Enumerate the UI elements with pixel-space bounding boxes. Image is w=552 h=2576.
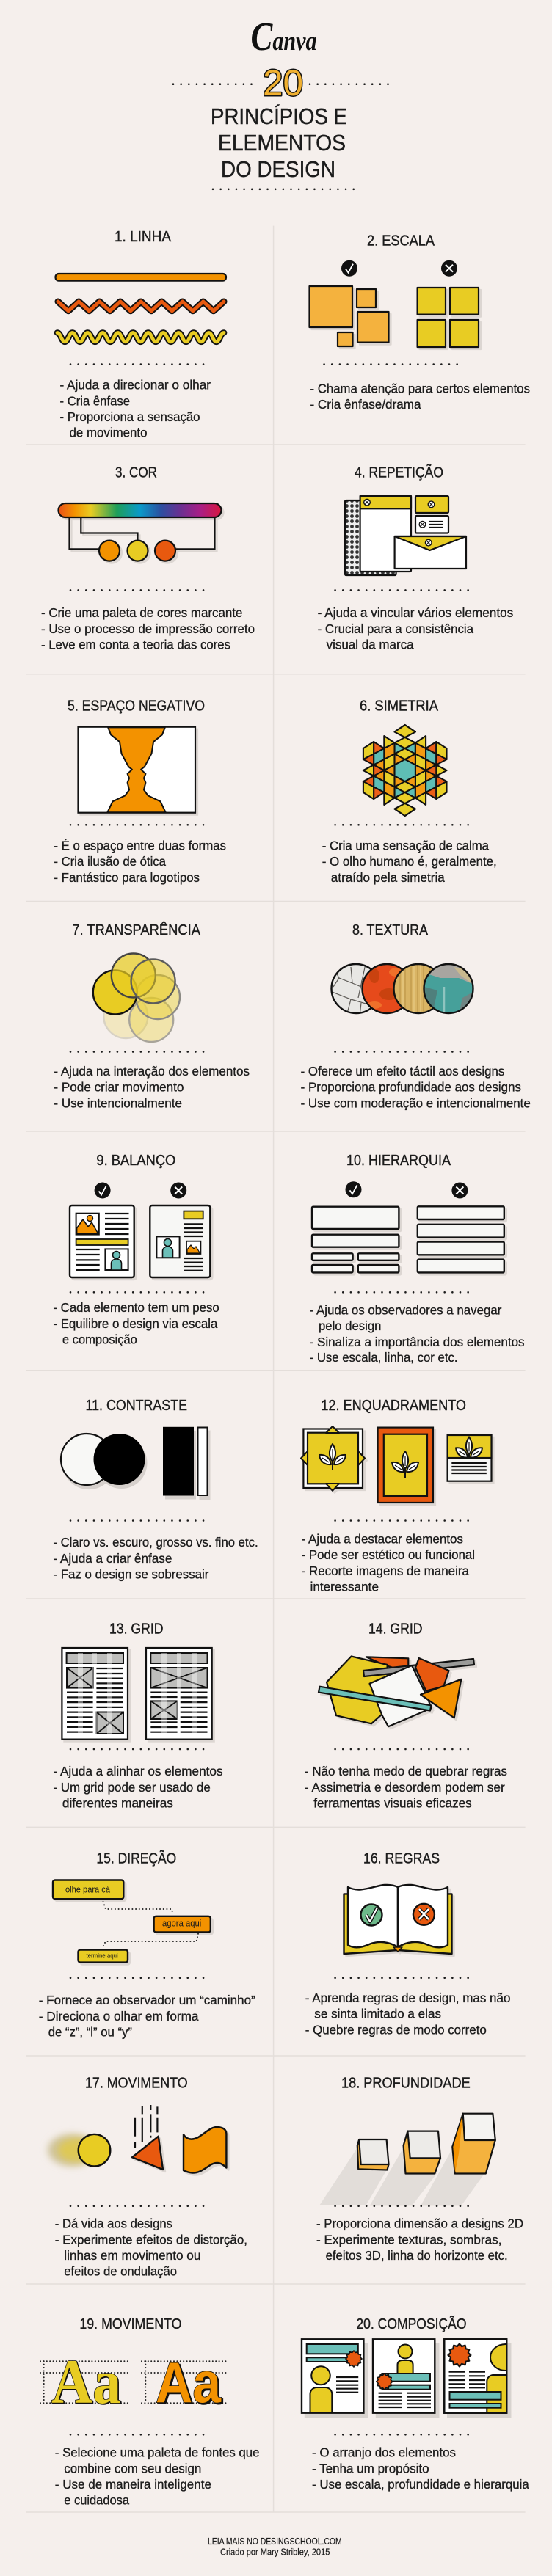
text block: - Experimente texturas, sombras, bbox=[316, 2232, 502, 2247]
icon: check bbox=[95, 1183, 111, 1199]
icon: open book bbox=[344, 1885, 452, 1954]
text block: - Selecione uma paleta de fontes que bbox=[55, 2445, 260, 2460]
heading: 6. SIMETRIA bbox=[360, 697, 438, 715]
panel: 16 regras bbox=[305, 1850, 510, 2037]
icon: image card bbox=[448, 1435, 492, 1481]
heading: 7. TRANSPARÊNCIA bbox=[72, 922, 200, 938]
text block: pelo design bbox=[319, 1318, 381, 1333]
text block bbox=[310, 381, 530, 412]
panel: 12 enquadramento bbox=[301, 1397, 492, 1594]
text block: - Use intencionalmente bbox=[54, 1095, 182, 1110]
icon: moving circle bbox=[48, 2134, 110, 2166]
heading: 3. COR bbox=[115, 464, 157, 481]
text block: atraído pela simetria bbox=[331, 870, 445, 885]
text block bbox=[55, 2445, 260, 2508]
text block: - Direciona o olhar em forma bbox=[39, 2009, 199, 2024]
icon: page layout three bbox=[444, 2339, 521, 2414]
icon: reading path: olhe para cá bbox=[65, 1884, 111, 1895]
panel: 6 simetria bbox=[322, 697, 497, 885]
heading: 2. ESCALA bbox=[367, 232, 435, 249]
icon: wavy flag bbox=[184, 2127, 226, 2173]
icon: stationery set bbox=[345, 496, 466, 575]
heading: 11. CONTRASTE bbox=[85, 1397, 187, 1414]
text block bbox=[55, 2216, 247, 2279]
text block: visual da marca bbox=[327, 638, 414, 652]
icon: grid page two bbox=[146, 1648, 212, 1740]
panel: 1 linha bbox=[56, 228, 226, 440]
icon: cross bbox=[451, 1183, 468, 1199]
text block: se sinta limitado a elas bbox=[314, 2007, 441, 2021]
panel: 19 movimento bbox=[40, 2316, 260, 2508]
title: PRINCÍPIOS E bbox=[211, 103, 347, 129]
icon: check bbox=[345, 1181, 361, 1197]
text block: - Claro vs. escuro, grosso vs. fino etc. bbox=[53, 1535, 258, 1550]
number 20: 20 bbox=[263, 62, 303, 103]
text block: de “z”, “l” ou “y” bbox=[48, 2025, 132, 2040]
text block bbox=[310, 1302, 525, 1365]
icon: cross bbox=[170, 1183, 186, 1199]
footer credits bbox=[208, 2536, 342, 2558]
text block bbox=[305, 1991, 510, 2037]
panel: 14 grid bbox=[305, 1621, 507, 1811]
text block: - Ajuda a criar ênfase bbox=[53, 1551, 172, 1566]
panel: 15 direcao bbox=[39, 1849, 255, 2040]
panel: 4 repeticao bbox=[318, 464, 514, 652]
text block: - Ajuda a alinhar os elementos bbox=[53, 1764, 223, 1778]
text block bbox=[54, 838, 226, 885]
icon: scattered shapes bbox=[319, 1657, 474, 1726]
text block bbox=[322, 838, 497, 885]
text block: - Assimetria e desordem podem ser bbox=[305, 1780, 505, 1795]
text block: - Use de maneira inteligente bbox=[55, 2477, 211, 2492]
footer credits: LEIA MAIS NO DESINGSCHOOL.COM bbox=[208, 2536, 342, 2547]
text block bbox=[312, 2445, 529, 2492]
heading: 16. REGRAS bbox=[363, 1850, 440, 1867]
panel: 8 textura bbox=[301, 922, 531, 1110]
icon: font samples: Aa bbox=[156, 2350, 222, 2415]
text block: - Sinaliza a importância dos elementos bbox=[310, 1335, 525, 1349]
heading: 12. ENQUADRAMENTO bbox=[321, 1397, 466, 1414]
text block: - Tenha um propósito bbox=[312, 2461, 429, 2475]
panel: 18 profundidade bbox=[316, 2075, 523, 2263]
text block: - Fornece ao observador um “caminho” bbox=[39, 1993, 255, 2007]
icon: colour spectrum bbox=[59, 503, 222, 561]
text block: diferentes maneiras bbox=[62, 1796, 173, 1811]
text block: - Cria ênfase bbox=[60, 393, 130, 408]
heading: 19. MOVIMENTO bbox=[79, 2316, 182, 2332]
text block: - Um grid pode ser usado de bbox=[53, 1780, 211, 1795]
footer credits: Criado por Mary Stribley, 2015 bbox=[220, 2547, 330, 2558]
icon: equal squares bbox=[418, 288, 479, 347]
text block: - Dá vida aos designs bbox=[55, 2216, 172, 2231]
icon: reading path: agora aqui bbox=[162, 1918, 201, 1929]
text block: e composição bbox=[62, 1332, 137, 1347]
text block: - Leve em conta a teoria das cores bbox=[41, 638, 230, 652]
text block: - Use escala, profundidade e hierarquia bbox=[312, 2477, 529, 2492]
text block: - Não tenha medo de quebrar regras bbox=[305, 1764, 507, 1778]
panel: 17 movimento bbox=[48, 2075, 247, 2279]
icon: ornate frame bbox=[301, 1426, 365, 1491]
icon: contrast bars bbox=[163, 1427, 207, 1495]
text block bbox=[53, 1535, 258, 1582]
text block bbox=[60, 378, 211, 440]
icon: falling triangle bbox=[132, 2105, 163, 2170]
icon: page layout one bbox=[302, 2339, 363, 2413]
text block: - Proporciona a sensação bbox=[60, 409, 200, 424]
text block: - Faz o design se sobressair bbox=[53, 1567, 209, 1582]
text block: - Pode ser estético ou funcional bbox=[302, 1547, 475, 1562]
text block: ferramentas visuais eficazes bbox=[313, 1796, 472, 1811]
title: DO DESIGN bbox=[221, 157, 335, 182]
text block: - Ajuda a destacar elementos bbox=[302, 1531, 463, 1546]
panel: 10 hierarquia bbox=[310, 1152, 525, 1365]
panel: 20 composicao bbox=[302, 2315, 529, 2492]
heading: 8. TEXTURA bbox=[352, 922, 428, 938]
heading: 15. DIREÇÃO bbox=[96, 1849, 176, 1867]
text block: - Equilibre o design via escala bbox=[53, 1316, 218, 1331]
text block: linhas em movimento ou bbox=[64, 2248, 200, 2263]
text block: - Use escala, linha, cor etc. bbox=[310, 1350, 458, 1365]
text block: - Crucial para a consistência bbox=[318, 621, 473, 636]
text block: - O arranjo dos elementos bbox=[312, 2445, 456, 2460]
icon: equal boxes bbox=[418, 1206, 504, 1272]
icon: font samples: Aa bbox=[51, 2346, 121, 2417]
heading: 17. MOVIMENTO bbox=[85, 2075, 188, 2092]
title bbox=[211, 103, 347, 182]
panel: 9 balanco bbox=[53, 1152, 219, 1347]
icon: varied squares bbox=[310, 286, 389, 346]
icon: 3D boxes bbox=[357, 2114, 495, 2173]
text block: - Recorte imagens de maneira bbox=[302, 1564, 469, 1578]
icon: overlapping circles bbox=[93, 954, 180, 1042]
text block: - Cria ilusão de ótica bbox=[54, 854, 166, 869]
text block: - Quebre regras de modo correto bbox=[305, 2022, 487, 2037]
heading: 10. HIERARQUIA bbox=[346, 1152, 451, 1169]
text block: - Ajuda os observadores a navegar bbox=[310, 1302, 502, 1317]
text block: - Ajuda na interação dos elementos bbox=[54, 1064, 250, 1079]
text block: - Ajuda a vincular vários elementos bbox=[318, 605, 514, 620]
text block bbox=[301, 1064, 531, 1110]
logo: Canva: Canva bbox=[251, 14, 317, 59]
text block: combine com seu design bbox=[64, 2461, 201, 2475]
panel: 3 cor bbox=[41, 464, 255, 652]
heading: 5. ESPAÇO NEGATIVO bbox=[68, 697, 205, 715]
icon: cross bbox=[441, 260, 457, 277]
text block: - Chama atenção para certos elementos bbox=[310, 381, 530, 395]
icon: reading path bbox=[53, 1880, 211, 1963]
text block bbox=[41, 605, 255, 652]
text block: efeitos de ondulação bbox=[64, 2264, 177, 2279]
heading: 1. LINHA bbox=[115, 228, 171, 245]
header bbox=[173, 14, 391, 189]
icon: hierarchy boxes bbox=[312, 1207, 399, 1272]
icon: symmetric pattern bbox=[363, 725, 446, 816]
text block: - Crie uma paleta de cores marcante bbox=[41, 605, 242, 620]
icon: font samples bbox=[40, 2346, 229, 2417]
icon: long shadows bbox=[320, 2145, 486, 2205]
text block: - Fantástico para logotipos bbox=[54, 870, 200, 885]
text block: - O olho humano é, geralmente, bbox=[322, 854, 497, 869]
text block: - Use com moderação e intencionalmente bbox=[301, 1095, 531, 1110]
text block: - Ajuda a direcionar o olhar bbox=[60, 378, 211, 393]
text block: efeitos 3D, linha do horizonte etc. bbox=[326, 2248, 508, 2263]
text block bbox=[54, 1064, 250, 1110]
text block bbox=[302, 1531, 475, 1594]
panel: 7 transparencia bbox=[54, 922, 250, 1110]
text block: - Cria ênfase/drama bbox=[310, 397, 421, 412]
text block: - Proporciona dimensão a designs 2D bbox=[316, 2216, 523, 2231]
text block bbox=[318, 605, 514, 652]
text block: e cuidadosa bbox=[64, 2493, 129, 2508]
panel: 11 contraste bbox=[53, 1397, 258, 1582]
icon: textured circles bbox=[330, 963, 476, 1016]
text block: - Aprenda regras de design, mas não bbox=[305, 1991, 510, 2005]
heading: 13. GRID bbox=[109, 1621, 163, 1638]
text block: - É o espaço entre duas formas bbox=[54, 838, 226, 853]
text block: - Use o processo de impressão correto bbox=[41, 621, 255, 636]
text block bbox=[316, 2216, 523, 2263]
panel: 5 espaco negativo bbox=[54, 697, 226, 885]
text block bbox=[39, 1993, 255, 2040]
icon: faces and vase bbox=[78, 727, 195, 813]
icon: reading path: termine aqui bbox=[87, 1952, 118, 1960]
icon: unbalanced page bbox=[150, 1205, 210, 1277]
text block: - Proporciona profundidade aos designs bbox=[301, 1080, 521, 1095]
icon: three lines bbox=[56, 274, 226, 342]
text block bbox=[53, 1300, 219, 1347]
text block: - Experimente efeitos de distorção, bbox=[55, 2232, 247, 2247]
panel: 2 escala bbox=[310, 232, 530, 412]
heading: 14. GRID bbox=[368, 1621, 423, 1638]
heading: 20. COMPOSIÇÃO bbox=[356, 2315, 467, 2332]
icon: grid page one bbox=[62, 1648, 128, 1740]
text block: - Cada elemento tem um peso bbox=[53, 1300, 219, 1315]
icon: contrast circles bbox=[61, 1434, 145, 1485]
icon: page layout two bbox=[373, 2339, 435, 2413]
text block: - Cria uma sensação de calma bbox=[322, 838, 489, 853]
text block: de movimento bbox=[69, 426, 147, 440]
text block bbox=[305, 1764, 507, 1811]
heading: 18. PROFUNDIDADE bbox=[341, 2075, 471, 2092]
icon: orange frame bbox=[378, 1428, 433, 1503]
icon: balanced page bbox=[70, 1205, 134, 1277]
text block: - Oferece um efeito táctil aos designs bbox=[301, 1064, 505, 1079]
text block: - Pode criar movimento bbox=[54, 1080, 184, 1095]
icon: check bbox=[341, 260, 357, 277]
panel: 13 grid bbox=[53, 1621, 223, 1811]
text block: interessante bbox=[310, 1580, 379, 1594]
text block bbox=[53, 1764, 223, 1811]
heading: 4. REPETIÇÃO bbox=[355, 464, 443, 481]
heading: 9. BALANÇO bbox=[96, 1152, 175, 1169]
title: ELEMENTOS bbox=[218, 131, 346, 156]
